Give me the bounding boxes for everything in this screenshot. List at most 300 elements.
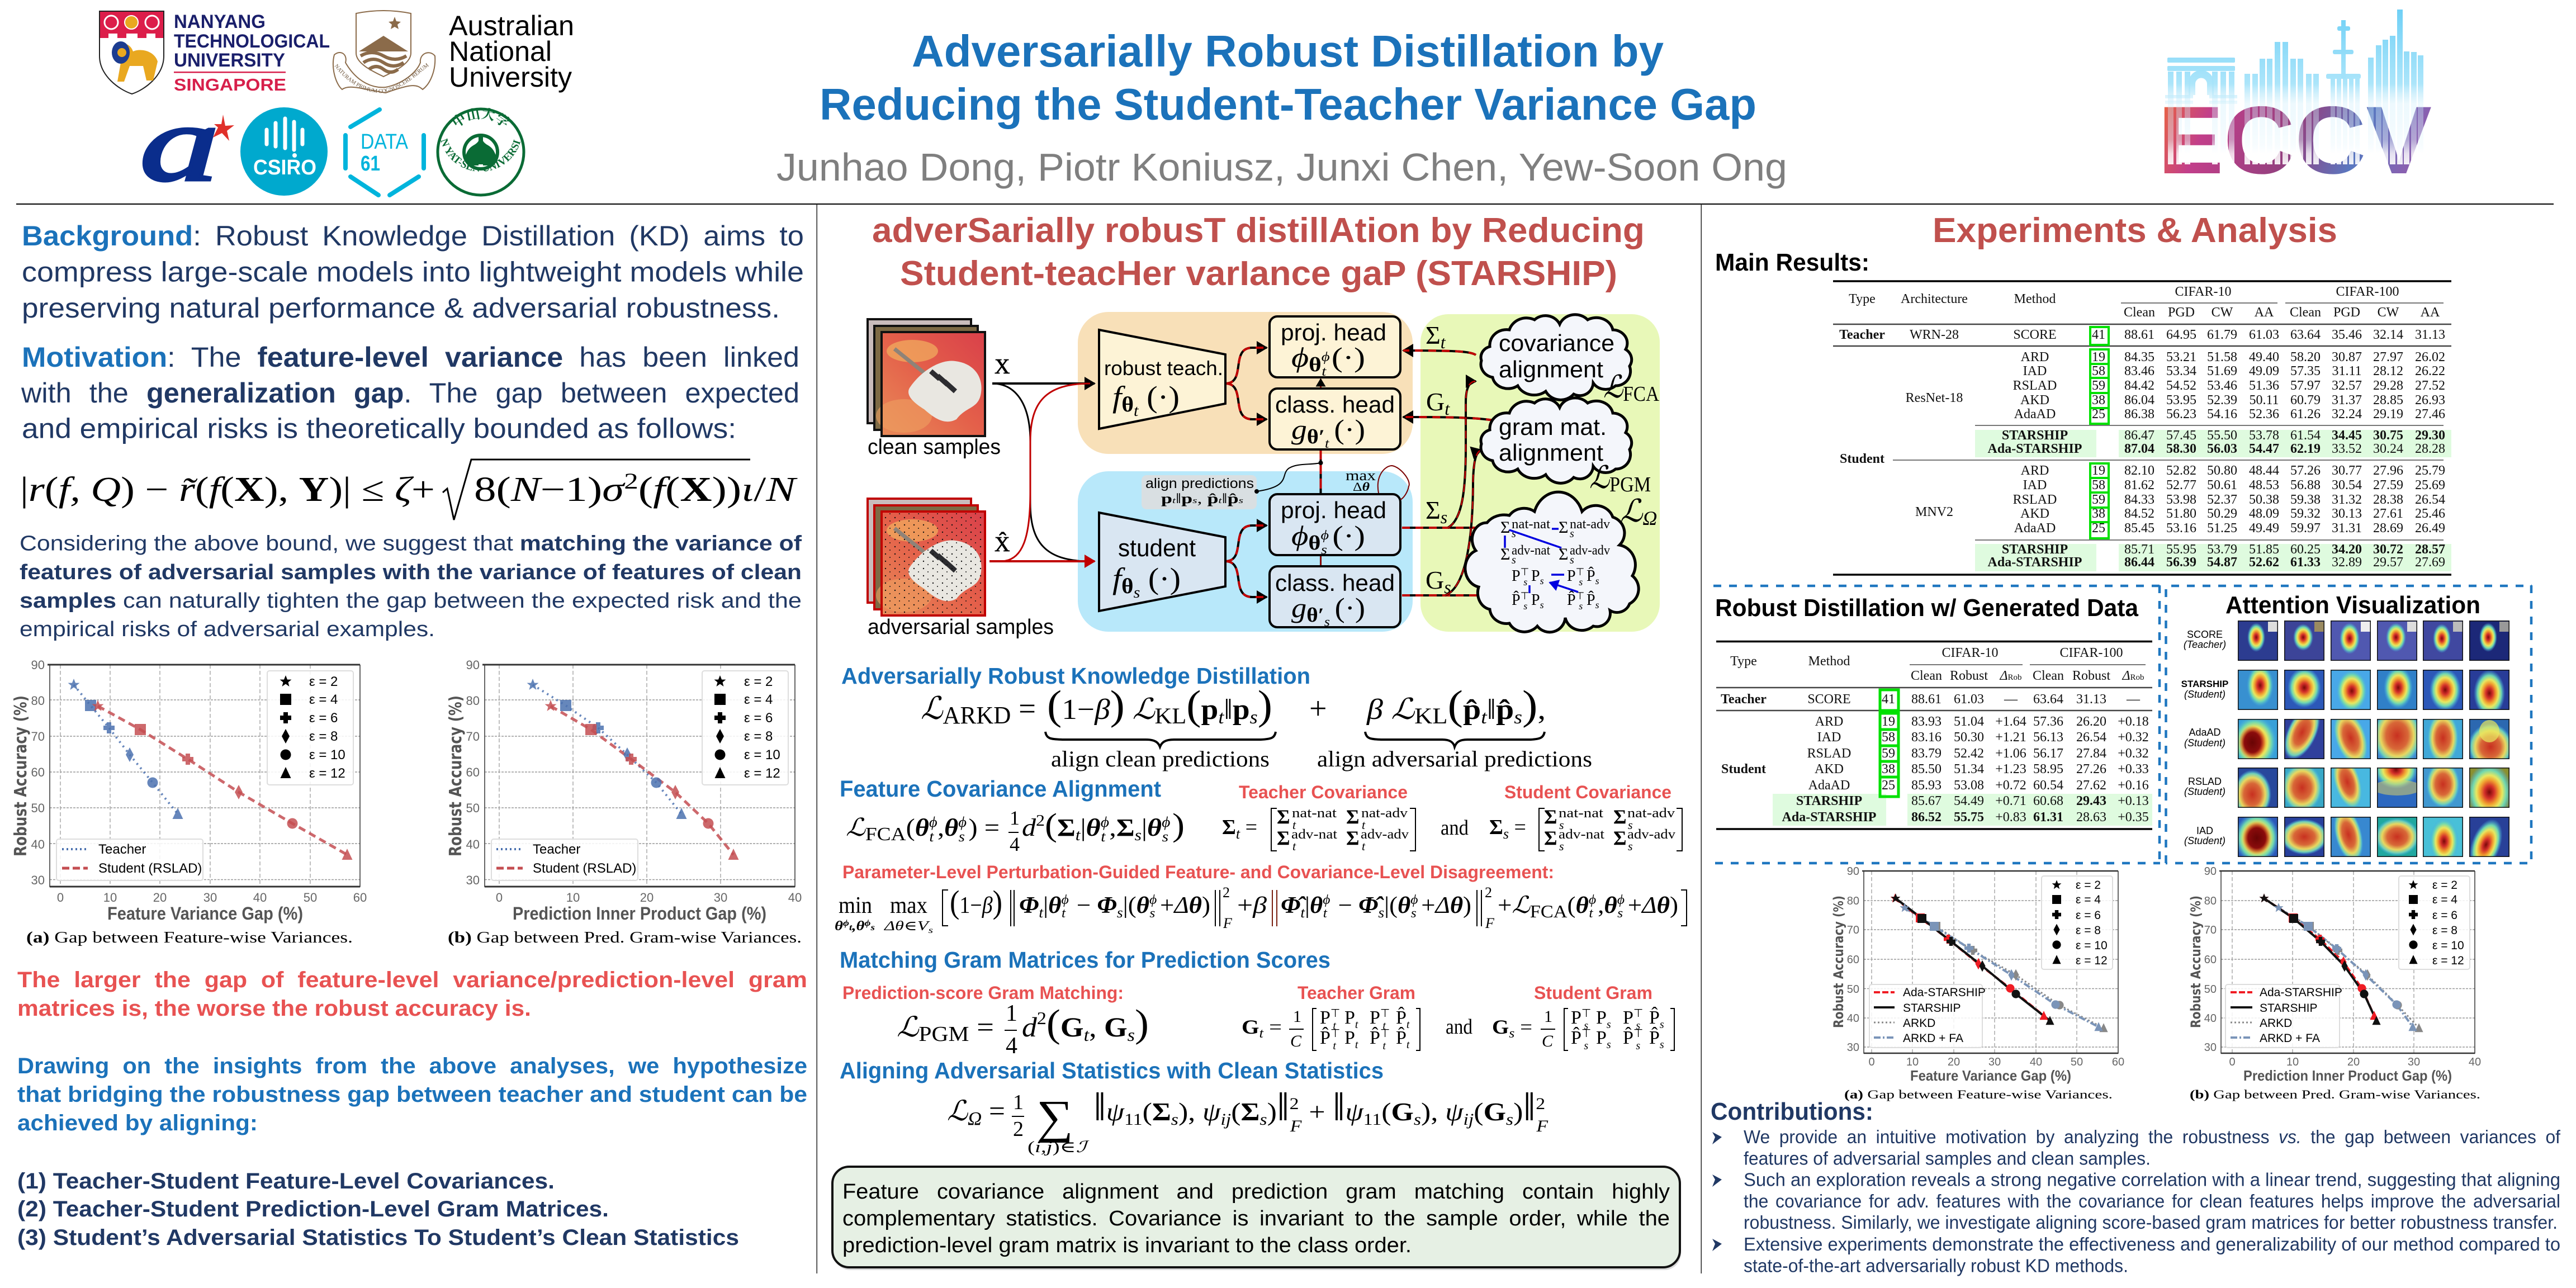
equation: FCA loss: | xyxy=(1142,814,1147,841)
cloud: gram matrix alignment xyxy=(1481,398,1632,483)
equation: gram matrices: t xyxy=(1333,1020,1336,1032)
chart: feature variance gap comparison: Ada-STARSHIP xyxy=(1903,986,1986,999)
equation: gram matrices: P̂ xyxy=(1396,1006,1407,1028)
equation: ARKD: = xyxy=(1011,692,1036,726)
logo: ECCV: ECCV xyxy=(2158,87,2432,194)
list: three alignment targets: (1) Teacher-Student Feature-Level Covariances. xyxy=(17,1169,555,1194)
equation: min-max objective: FCA xyxy=(1530,901,1568,921)
equation: gram matrices: t xyxy=(1382,1020,1386,1032)
cloud: adversarial to clean statistics: ⊤ xyxy=(1521,566,1529,577)
logo: Australian National University: National xyxy=(449,36,552,67)
chart: prediction inner product gap comparison: Prediction Inner Product Gap (%) xyxy=(2243,1067,2452,1084)
table: generated data results: 58 xyxy=(1882,730,1895,745)
table: main results: 59.32 xyxy=(2290,506,2321,521)
equation: omega loss: s xyxy=(1171,1110,1178,1129)
box: student projection head xyxy=(1270,494,1400,557)
table: main results: 55.50 xyxy=(2207,428,2237,443)
equation: covariance matrices: t xyxy=(1236,826,1240,842)
table: main results: 61.33 xyxy=(2290,555,2321,570)
chart: feature variance gap comparison: 50 xyxy=(2071,1056,2083,1068)
table: main results: 52.39 xyxy=(2207,393,2237,408)
panel: centre column method xyxy=(832,211,1687,1270)
equation: FCA loss: ϕ xyxy=(1162,814,1170,830)
labels: loss and feature symbols: ℒ xyxy=(1589,461,1612,495)
equation: min-max objective: s xyxy=(1378,905,1384,921)
equation: omega loss: ( xyxy=(1474,1097,1484,1126)
table: main results: 81.62 xyxy=(2124,478,2154,493)
table: main results: 27.59 xyxy=(2373,478,2403,493)
equation: covariance matrices: Σ xyxy=(1613,827,1627,849)
table: main results: 29.28 xyxy=(2373,378,2403,393)
logo: CSIRO xyxy=(240,107,328,196)
equation: gram matrices: G xyxy=(1242,1016,1259,1038)
cloud: adversarial to clean statistics: ⊤ xyxy=(1521,590,1529,602)
chart: feature variance gap comparison: Robust Accuracy (%) xyxy=(1831,896,1846,1028)
equation: PGM loss: , xyxy=(1089,1011,1097,1043)
table: main results: 26.22 xyxy=(2415,364,2445,378)
callout: align predictions: align predictions xyxy=(1145,476,1254,491)
table: generated data results: 88.61 xyxy=(1911,692,1942,707)
table: main results: 26.49 xyxy=(2415,521,2445,536)
equation: covariance matrices: Σ xyxy=(1346,827,1360,849)
text block: background: preserving natural performance & adversarial robustness. xyxy=(22,292,780,324)
table: generated data results: 63.64 xyxy=(2033,692,2063,707)
chart: prediction inner product gap vs robust accuracy (teacher/student): ε = 12 xyxy=(744,766,780,781)
table: main results: 50.38 xyxy=(2249,493,2279,507)
equation: FCA loss: θ xyxy=(915,814,929,841)
table: generated data results: 61.31 xyxy=(2033,810,2063,825)
cloud: adversarial to clean statistics: P̂ xyxy=(1567,591,1576,609)
equation: gram matrices: s xyxy=(1636,1020,1640,1032)
table: main results: RSLAD xyxy=(2013,378,2057,393)
table: generated data results: 26.54 xyxy=(2076,730,2106,745)
equation: gram matrices: P̂ xyxy=(1320,1026,1330,1048)
table: generated data results: +0.13 xyxy=(2118,794,2149,808)
callout: align predictions xyxy=(1142,461,1323,509)
table: generated data results: AdaAD xyxy=(1808,778,1850,793)
equation: gram matrices: ⊤ xyxy=(1380,1027,1390,1040)
panel: attention visualization: Attention Visualization xyxy=(2225,591,2480,619)
box: student classification head: g xyxy=(1291,592,1305,623)
equation: FCA loss: | xyxy=(1081,814,1086,841)
table: generated data results: 51.34 xyxy=(1954,762,1984,776)
network: robust teacher: θ xyxy=(1121,393,1134,416)
table: main results: 28.57 xyxy=(2415,542,2445,557)
table: generated data results: 83.79 xyxy=(1911,746,1942,761)
equation: min-max objective: t xyxy=(849,923,853,932)
heading: experiments and analysis: Experiments & Analysis xyxy=(1933,211,2337,250)
table: main results: 32.14 xyxy=(2373,328,2403,342)
table: generated data results: Δ xyxy=(1999,669,2008,683)
table: main results: 61.26 xyxy=(2290,407,2321,422)
chart: prediction inner product gap vs robust accuracy (teacher/student): 10 xyxy=(566,891,580,905)
equation: ARKD: ℒ xyxy=(921,692,943,726)
equation: min-max objective: Φ̂ xyxy=(1281,893,1306,918)
labels: attention rows: (Student) xyxy=(2184,835,2225,846)
box: teacher classification head: t xyxy=(1325,437,1330,451)
equation: min-max objective: F xyxy=(1223,915,1233,931)
chart: prediction inner product gap vs robust accuracy (teacher/student): ε = 2 xyxy=(744,674,773,689)
equation: FCA loss: θ xyxy=(944,814,958,841)
table: generated data results: Method xyxy=(1808,654,1850,669)
chart: feature variance gap comparison: Feature Variance Gap (%) xyxy=(1910,1067,2071,1084)
equation: omega loss: ) xyxy=(1267,1097,1277,1126)
table: main results: 38 xyxy=(2092,506,2105,521)
logo: Nanyang Technological University: TECHNOLOGICAL xyxy=(174,31,330,52)
table: main results: 34.20 xyxy=(2332,542,2362,557)
equation: min-max objective: s xyxy=(1411,906,1417,921)
equation: omega loss: s xyxy=(1414,1110,1421,1129)
equation: omega loss: = xyxy=(982,1095,1005,1126)
table: main results: 52.82 xyxy=(2166,463,2196,478)
heading: parameter-level disagreement: Parameter-Level Perturbation-Guided Feature- and Covariance-Level Disagreement: xyxy=(842,862,1554,882)
chart: prediction inner product gap comparison: ε = 8 xyxy=(2432,924,2457,937)
table: main results: 27.61 xyxy=(2373,506,2403,521)
equation: omega loss: G xyxy=(1484,1097,1506,1126)
text block: motivation: and empirical risks is theoretically bounded as follows: xyxy=(22,413,736,444)
equation: FCA loss: t xyxy=(1076,827,1081,844)
equation: FCA loss: , xyxy=(937,814,944,841)
table: generated data results: +0.71 xyxy=(1995,794,2026,808)
chart: prediction inner product gap comparison: 0 xyxy=(2229,1056,2236,1068)
table: generated data results: 41 xyxy=(1882,692,1895,707)
table: main results: 59.38 xyxy=(2290,493,2321,507)
chart: feature variance gap vs robust accuracy (teacher/student): ε = 4 xyxy=(309,692,338,707)
cloud: adversarial to clean statistics: P xyxy=(1567,567,1576,585)
table: main results: 28.85 xyxy=(2373,393,2403,408)
chart: prediction inner product gap comparison: ε = 10 xyxy=(2432,939,2464,952)
cloud: adversarial to clean statistics: ⊤ xyxy=(1576,566,1584,577)
equation: ARKD: KL xyxy=(1155,703,1186,728)
text block: background: Background : Robust Knowledge Distillation (KD) aims to xyxy=(22,220,804,252)
table: generated data results: 29.43 xyxy=(2076,794,2106,808)
chart: feature variance gap comparison: 60 xyxy=(2112,1056,2124,1068)
equation: min-max objective: − xyxy=(1071,893,1097,918)
equation: gram matrices: P xyxy=(1623,1007,1633,1028)
equation: min-max objective: Φ̂ xyxy=(1358,893,1384,918)
text block: red conclusion: matrices is, the worse the robust accuracy is. xyxy=(17,996,531,1021)
network: student: student xyxy=(1118,534,1196,562)
equation: generalization bound: |r(f, Q ) − r̃(f(X), Y)| ≤ ζ+ xyxy=(20,471,435,509)
cloud: adversarial to clean statistics: Σ xyxy=(1559,518,1568,537)
labels: loss and feature symbols: t xyxy=(1445,399,1450,419)
labels: loss and feature symbols: G xyxy=(1426,566,1444,594)
network: robust teacher: robust teach. xyxy=(1104,357,1223,380)
equation: min-max objective: Δθ ∈ V xyxy=(884,919,925,934)
equation: gram matrices: t xyxy=(1259,1026,1265,1041)
equation: min-max objective: ϕ xyxy=(1323,893,1330,907)
equation: omega loss: ‖ψ xyxy=(1333,1085,1361,1129)
chart: prediction inner product gap vs robust accuracy (teacher/student): ε = 10 xyxy=(744,747,780,763)
chart: feature variance gap comparison: 30 xyxy=(1988,1056,2001,1068)
equation: gram matrices: t xyxy=(1333,1040,1336,1052)
table: main results: CW xyxy=(2378,305,2399,320)
table: main results: 28.69 xyxy=(2373,521,2403,536)
equation: min-max objective: t xyxy=(1062,906,1067,921)
text block: contributions: features of adversarial samples and clean samples. xyxy=(1744,1148,2151,1168)
table: main results: 82.10 xyxy=(2124,463,2154,478)
table: main results: 86.47 xyxy=(2124,428,2154,443)
panel: teacher background xyxy=(1078,312,1413,454)
table: main results: 53.78 xyxy=(2249,428,2279,443)
cloud: adversarial to clean statistics: nat-nat xyxy=(1512,517,1550,532)
equation: omega loss: Σ xyxy=(1152,1097,1171,1126)
table: main results: 29.57 xyxy=(2373,555,2403,570)
table: main results: 50.61 xyxy=(2207,478,2237,493)
table: main results: AKD xyxy=(2020,393,2049,408)
table: main results: 51.85 xyxy=(2249,542,2279,557)
table: main results: 61.79 xyxy=(2207,328,2237,342)
equation: gram matrices: P xyxy=(1596,1027,1607,1048)
labels: attention rows: (Student) xyxy=(2184,786,2225,797)
equation: covariance matrices: Σ xyxy=(1544,806,1557,828)
equation: gram matrices: t xyxy=(1355,1019,1358,1031)
table: generated data results: Robust xyxy=(2072,669,2110,683)
labels: loss and feature symbols: Σ xyxy=(1426,496,1441,524)
equation: omega loss: ‖ xyxy=(1277,1085,1290,1129)
heatmaps: RSLAD student xyxy=(2233,751,2512,821)
chart: prediction inner product gap comparison: 30 xyxy=(2408,1056,2420,1068)
labels: loss and feature symbols: ℒ xyxy=(1620,494,1642,529)
heading: STARSHIP xyxy=(872,211,1645,293)
table: generated data results: 38 xyxy=(1882,762,1895,776)
box: teacher projection head xyxy=(1270,316,1400,379)
table: main results: 61.54 xyxy=(2290,428,2321,443)
equation: min-max objective: t xyxy=(1300,905,1305,921)
chart: feature variance gap comparison: 40 xyxy=(1847,1012,1859,1025)
table: main results: 53.79 xyxy=(2207,542,2237,557)
equation: covariance matrices: nat-nat xyxy=(1292,806,1337,821)
equation: FCA loss: Σ xyxy=(1057,814,1076,841)
chart: feature variance gap comparison: 70 xyxy=(1847,924,1859,936)
table: main results: 30.54 xyxy=(2332,478,2362,493)
table: generated data results: +0.83 xyxy=(1995,810,2026,825)
logo: Australian National University: NATURAM PRIMUM COGNOSCERE RERUM xyxy=(334,63,429,93)
table: main results: 85.71 xyxy=(2124,542,2154,557)
equation: min-max objective: +β xyxy=(1237,893,1267,918)
table: main results: 59 xyxy=(2092,378,2105,393)
equation: min-max objective: θ xyxy=(1137,893,1149,918)
callout: complementary statistics: complementary statistics. Covariance is invariant to the sample order, while the xyxy=(842,1207,1670,1230)
equation: gram matrices: s xyxy=(1636,1040,1640,1052)
equation: min-max objective: +ℒ xyxy=(1498,893,1529,918)
equation: gram matrices: G xyxy=(1492,1016,1509,1038)
table: main results: 54.52 xyxy=(2166,378,2196,393)
equation: ARKD: p̂ xyxy=(1496,694,1514,726)
text block: background: compress large-scale models into lightweight models while xyxy=(22,256,804,287)
equation: min-max objective: + xyxy=(1421,893,1436,918)
heading: STARSHIP: Student-teacHer varIance gaP (STARSHIP) xyxy=(900,254,1617,293)
table: main results: STARSHIP xyxy=(2002,428,2068,443)
chart: feature variance gap vs robust accuracy (teacher/student): Robust Accuracy (%) xyxy=(11,695,31,856)
equation: omega loss xyxy=(947,1085,1549,1156)
equation: PGM loss: PGM xyxy=(918,1022,969,1046)
equation: min-max objective: − xyxy=(1332,893,1358,918)
table: main results: 50.29 xyxy=(2207,506,2237,521)
equation: generalization bound: 2 xyxy=(624,468,638,494)
equation: gram matrices: s xyxy=(1607,1039,1611,1051)
equation: min-max objective: ϕ xyxy=(843,918,849,928)
equation: gram matrices: s xyxy=(1660,1039,1664,1051)
equation: omega loss: ), xyxy=(1178,1097,1195,1126)
equation: min-max objective: + xyxy=(1628,893,1642,918)
table: main results: 54.87 xyxy=(2207,555,2237,570)
equation: covariance matrices: adv-nat xyxy=(1291,827,1337,842)
table: generated data results: CIFAR-10 xyxy=(1942,646,1998,660)
table: generated data results: 59 xyxy=(1882,746,1895,761)
equation: ARKD: KL xyxy=(1414,703,1448,728)
table: generated data results: +1.64 xyxy=(1995,714,2026,729)
table: main results: 27.69 xyxy=(2415,555,2445,570)
equation: FCA loss: ) xyxy=(1172,807,1185,843)
cloud: adversarial to clean statistics: adv-nat xyxy=(1512,543,1550,558)
labels: loss and feature symbols: PGM xyxy=(1609,473,1651,496)
chart: prediction inner product gap comparison: STARSHIP xyxy=(2260,1002,2317,1015)
equation: FCA loss: 2 xyxy=(1036,812,1045,830)
table: main results: Method xyxy=(2014,292,2056,306)
table: main results: 87.04 xyxy=(2124,442,2154,456)
network: robust teacher: t xyxy=(1134,402,1139,420)
table: main results: 86.04 xyxy=(2124,393,2154,408)
equation: generalization bound: ( xyxy=(638,471,653,509)
table: main results: 56.39 xyxy=(2166,555,2196,570)
table: main results: 84.42 xyxy=(2124,378,2154,393)
chart: prediction inner product gap vs robust accuracy (teacher/student): Teacher xyxy=(533,842,580,857)
table: generated data results: 28.63 xyxy=(2076,810,2106,825)
table: generated data results: 58.95 xyxy=(2033,762,2063,776)
equation: min-max objective: θ xyxy=(1576,893,1589,918)
panel: robust distillation with generated data xyxy=(1713,585,2160,863)
table: main results: 29.19 xyxy=(2373,407,2403,422)
table: generated data results: +0.32 xyxy=(2118,730,2149,745)
table: main results: 29.30 xyxy=(2415,428,2445,443)
box: teacher projection head: (·) xyxy=(1332,342,1365,373)
equation: gram matrices: P xyxy=(1571,1007,1581,1028)
equation: min-max objective: θ xyxy=(835,919,841,934)
equation: FCA loss: θ xyxy=(1086,814,1101,841)
equation: PGM loss: ( xyxy=(1046,1002,1060,1045)
chart: prediction inner product gap comparison xyxy=(2188,865,2481,1101)
equation: omega loss: Ω xyxy=(968,1109,982,1129)
table: main results: Teacher xyxy=(1839,328,1885,342)
table: main results: 26.02 xyxy=(2415,350,2445,364)
equation: gram matrices: t xyxy=(1382,1040,1386,1052)
equation: omega loss: ‖ψ xyxy=(1093,1085,1122,1129)
equation: min-max objective: s xyxy=(1149,906,1155,921)
chart: feature variance gap comparison: ε = 4 xyxy=(2076,893,2101,906)
equation: PGM loss: G xyxy=(1060,1011,1084,1043)
equation: FCA loss: t xyxy=(929,828,934,845)
table: generated data results: Robust xyxy=(1950,669,1988,683)
chart: feature variance gap vs robust accuracy (teacher/student): 50 xyxy=(31,801,45,815)
logo: Australian National University: Australian xyxy=(449,10,574,41)
chart: feature variance gap vs robust accuracy (teacher/student): ε = 2 xyxy=(309,674,338,689)
table: main results: 25.46 xyxy=(2415,506,2445,521)
equation: FCA loss: s xyxy=(1162,828,1168,845)
table: generated data results: 25 xyxy=(1882,778,1895,793)
table: generated data results: — xyxy=(2126,692,2141,707)
heading: matching gram matrices: Matching Gram Matrices for Prediction Scores xyxy=(840,947,1330,973)
equation: gram matrices: 1 xyxy=(1544,1007,1552,1026)
chart: prediction inner product gap comparison: ε = 12 xyxy=(2432,954,2464,967)
table: generated data results: 86.52 xyxy=(1911,810,1942,825)
equation: omega loss: ψ xyxy=(1445,1097,1460,1126)
chart: feature variance gap vs robust accuracy (teacher/student) xyxy=(11,658,367,946)
table: generated data results: Type xyxy=(1730,654,1757,669)
table: generated data results: 54.49 xyxy=(1954,794,1984,808)
equation: min-max objective: s xyxy=(1117,905,1123,921)
table: main results: 59 xyxy=(2092,493,2105,507)
table: main results: 57.26 xyxy=(2290,463,2321,478)
table: generated data results: SCORE xyxy=(1807,692,1851,707)
logo: Australian National University xyxy=(332,10,574,93)
equation: min-max objective: 2 xyxy=(1485,884,1492,901)
cloud: adversarial to clean statistics: s xyxy=(1570,528,1574,540)
equation: covariance matrices: t xyxy=(1362,839,1366,853)
equation: min-max objective: + xyxy=(1160,893,1174,918)
images: adversarial samples: adversarial samples xyxy=(868,615,1054,639)
cloud: adversarial to clean statistics: s xyxy=(1512,554,1516,566)
table: main results: SCORE xyxy=(2013,328,2057,342)
table: generated data results: +1.21 xyxy=(1995,730,2026,745)
logo: A*STAR: a xyxy=(140,83,219,204)
table: main results: 64.95 xyxy=(2166,328,2196,342)
labels: attention rows: STARSHIP xyxy=(2181,679,2228,689)
text block: motivation: with the generalization gap. The gap between expected xyxy=(21,377,799,409)
equation: ARKD: t xyxy=(1218,707,1225,728)
table: main results: 51.80 xyxy=(2166,506,2196,521)
label: max delta theta loop: max xyxy=(1346,467,1376,484)
equation: generalization bound xyxy=(20,460,798,520)
heading: main results: Main Results: xyxy=(1715,249,1869,276)
table: main results: Architecture xyxy=(1901,292,1968,306)
cloud: gram matrix alignment: alignment xyxy=(1499,439,1603,466)
chart: prediction inner product gap comparison: 80 xyxy=(2204,895,2217,907)
chart: feature variance gap vs robust accuracy (teacher/student): 60 xyxy=(353,891,367,905)
equation: gram matrices: P̂ xyxy=(1623,1026,1633,1048)
equation: gram matrices: = xyxy=(1263,1016,1282,1038)
cloud: adversarial to clean statistics: P̂ xyxy=(1587,591,1595,609)
table: main results: 51.69 xyxy=(2207,364,2237,378)
cloud: adversarial to clean statistics: s xyxy=(1523,600,1527,612)
equation: omega loss: 2 xyxy=(1536,1095,1545,1113)
equation: omega loss: F xyxy=(1536,1117,1549,1135)
equation: omega loss: F xyxy=(1290,1117,1302,1135)
table: main results: Ada-STARSHIP xyxy=(1988,555,2082,570)
equation: ARKD: (1−β) ℒ xyxy=(1047,683,1153,728)
labels: attention rows: IAD xyxy=(2196,825,2213,836)
table: main results: 25.69 xyxy=(2415,478,2445,493)
equation: PGM loss: t xyxy=(1084,1025,1090,1045)
chart: prediction inner product gap vs robust accuracy (teacher/student): 90 xyxy=(466,658,480,672)
table: main results: 33.52 xyxy=(2332,442,2362,456)
table: generated data results: AKD xyxy=(1815,762,1844,776)
table: main results: ResNet-18 xyxy=(1906,391,1963,405)
table: main results: 30.77 xyxy=(2332,463,2362,478)
chart: feature variance gap comparison: ε = 2 xyxy=(2076,879,2101,892)
table: main results: STARSHIP xyxy=(2002,542,2068,557)
equation: PGM loss xyxy=(897,1001,1149,1059)
table: main results: 57.45 xyxy=(2166,428,2196,443)
equation: gram matrices: P xyxy=(1596,1007,1607,1028)
table: main results: 28.38 xyxy=(2373,493,2403,507)
labels: attention rows: RSLAD xyxy=(2188,776,2222,787)
equation: covariance matrices: nat-adv xyxy=(1361,806,1408,821)
equation: min-max objective: ϕ xyxy=(1149,893,1157,907)
equation: omega loss: ℒ xyxy=(947,1095,967,1126)
table: main results: 25 xyxy=(2092,407,2105,422)
table: main results: 52.62 xyxy=(2249,555,2279,570)
